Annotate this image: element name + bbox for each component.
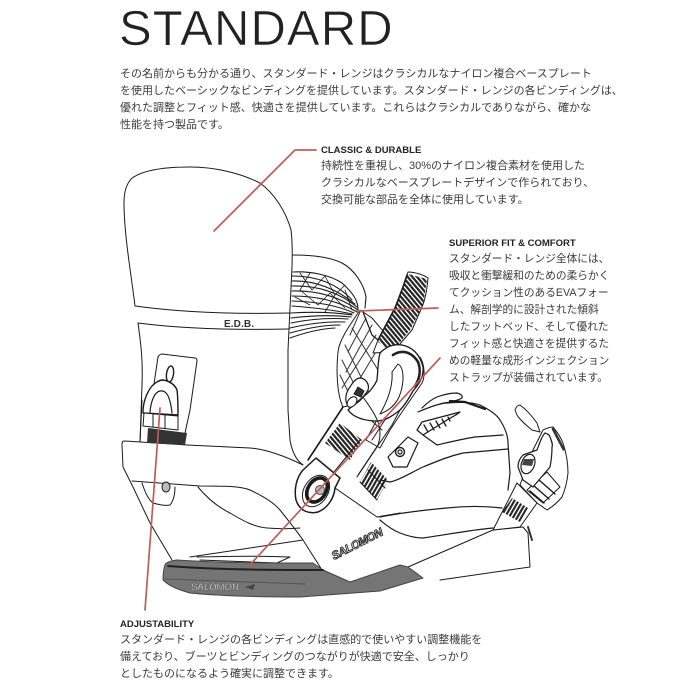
- heelcup pivot: [295, 458, 340, 513]
- leader: classic and durable: [214, 150, 316, 231]
- heel plate: [122, 441, 400, 570]
- adjustability text: としたものになるよう確実に調整できます。: [120, 668, 339, 680]
- leader: adjustability: [145, 408, 160, 610]
- superior fit text: てクッション性のあるEVAフォー: [449, 287, 609, 299]
- title: STANDARD: [119, 2, 394, 56]
- baseplate disc: [163, 560, 423, 597]
- classic and durable text: クラシカルなベースプレートデザインで作られており、: [321, 177, 594, 189]
- heel slider adjuster: [140, 354, 197, 445]
- ankle strap: [337, 272, 428, 448]
- leader: superior fit and comfort: [248, 308, 440, 567]
- highback lattice: [290, 255, 366, 338]
- classic and durable text: [321, 160, 594, 206]
- baseplate disc: SALOMON: [191, 582, 239, 593]
- adjustability text: スタンダード・レンジの各ビンディングは直感的で使いやすい調整機能を: [120, 634, 482, 646]
- classic and durable text: 交換可能な部品を全体に使用しています。: [321, 194, 529, 206]
- superior fit text: フィット感と快適さを提供するた: [449, 338, 609, 350]
- superior fit text: ム、解剖学的に設計された傾斜: [449, 304, 599, 316]
- intro text: を使用したベーシックなビンディングを提供しています。スタンダード・レンジの各ビンディングは、: [120, 85, 623, 97]
- highback: E.D.B.: [224, 319, 254, 330]
- adjustability heading: ADJUSTABILITY: [120, 619, 194, 630]
- classic and durable text: 持続性を重視し、30%のナイロン複合素材を使用した: [321, 160, 585, 172]
- toe side ratchet: [493, 405, 568, 530]
- heel cup base: [408, 527, 532, 580]
- intro text: その名前からも分かる通り、スタンダード・レンジはクラシカルなナイロン複合ベースプレート: [120, 68, 592, 80]
- superior fit text: ストラップが装備されています。: [449, 372, 608, 384]
- superior fit text: 吸収と衝撃緩和のための柔らかく: [449, 270, 609, 282]
- lower strap teeth: [308, 397, 392, 500]
- intro text: 性能を持つ製品です。: [120, 119, 229, 131]
- classic and durable heading: CLASSIC & DURABLE: [321, 145, 421, 156]
- superior fit text: めの軽量な成形インジェクション: [449, 355, 609, 367]
- intro text: 優れた調整とフィット感、快適さを提供しています。これらはクラシカルでありながら、確かな: [120, 102, 591, 114]
- adjustability text: 備えており、ブーツとビンディングのつながりが快適で安全、しっかり: [120, 651, 470, 663]
- superior fit text: スタンダード・レンジ全体には、: [449, 253, 609, 265]
- adjustability text: [120, 634, 482, 680]
- heel plate: SALOMON: [330, 526, 386, 563]
- superior fit text: [449, 252, 609, 384]
- intro text: [120, 68, 623, 131]
- superior fit text: したフットベッド、そして優れた: [449, 321, 609, 333]
- superior fit heading: SUPERIOR FIT & COMFORT: [449, 238, 576, 249]
- heel counter: [380, 393, 510, 538]
- highback: [124, 167, 303, 465]
